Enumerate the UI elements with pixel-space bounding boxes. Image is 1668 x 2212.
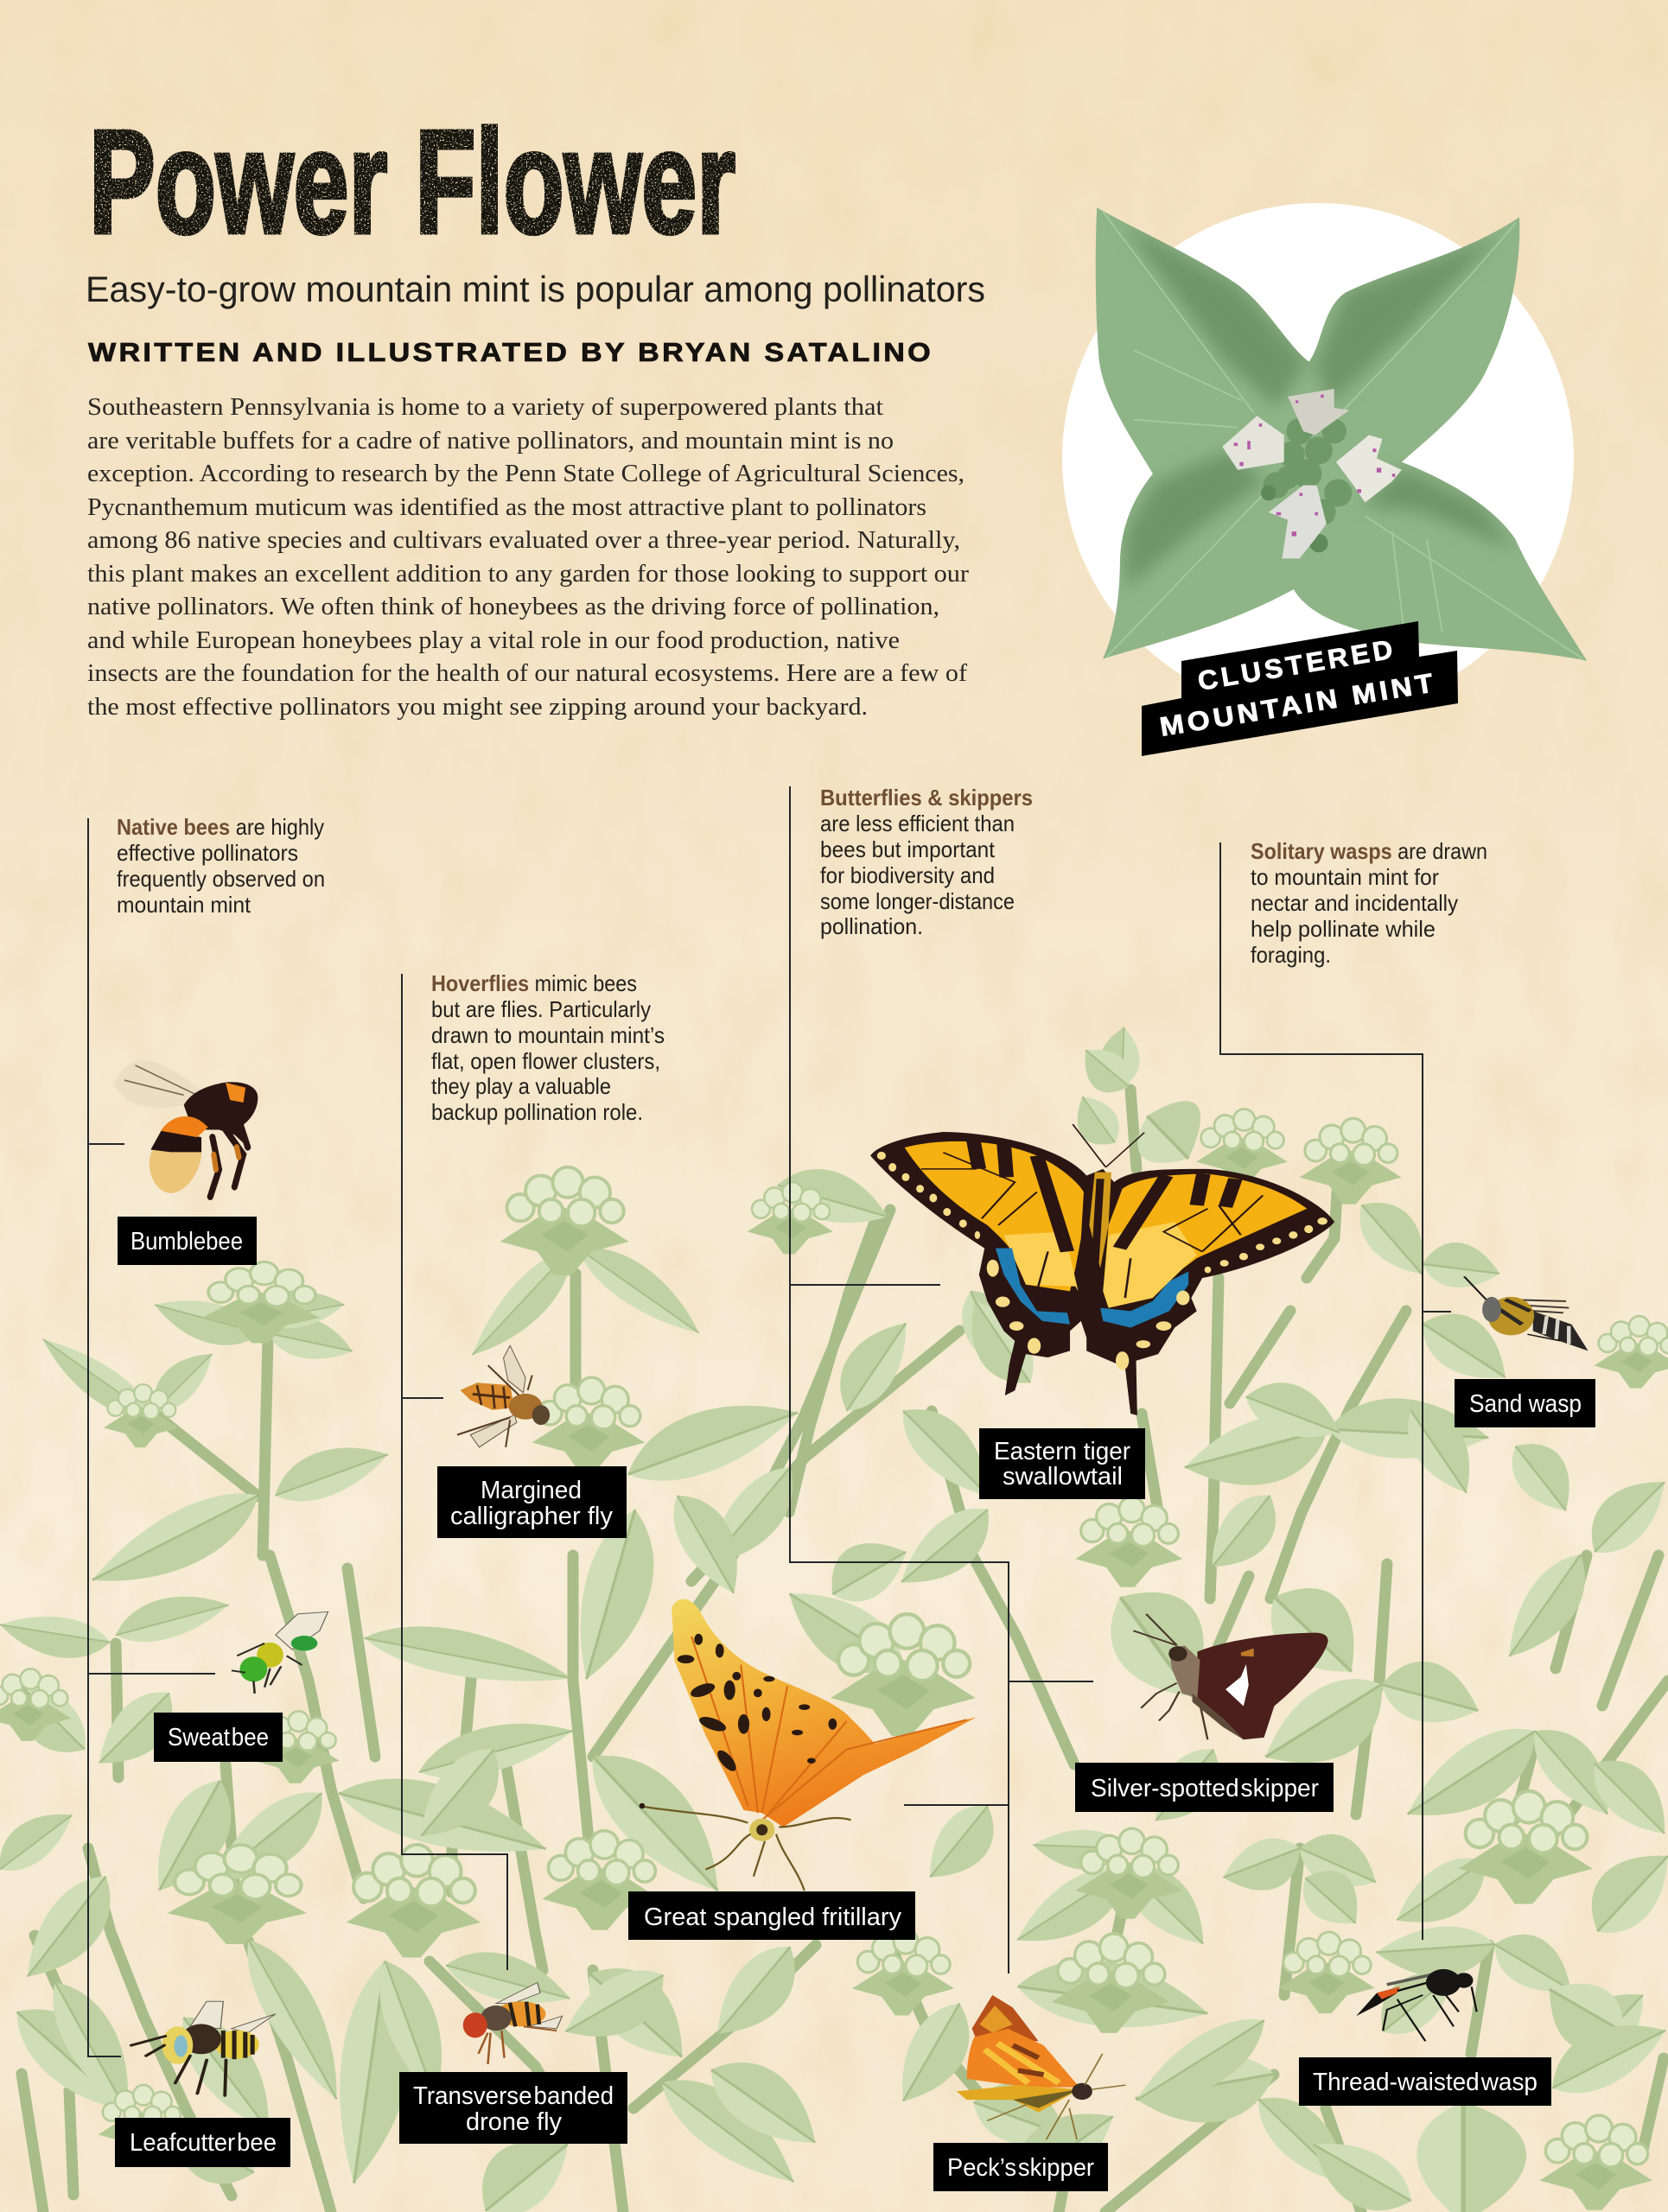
text block: solitary wasps: Solitary wasps are drawn: [1251, 838, 1487, 864]
intro body text: Southeastern Pennsylvania is home to a variety of superpowered plants that: [87, 393, 883, 421]
icon: margined calligrapher fly: [457, 1345, 550, 1447]
label: great spangled fritillary: Great spangled fritillary: [644, 1904, 901, 1931]
text block: solitary wasps: help pollinate while: [1251, 916, 1436, 942]
subtitle: Easy-to-grow mountain mint is popular among pollinators: [86, 269, 985, 309]
label: silver-spotted skipper: Silver-spotted skipper: [1091, 1775, 1319, 1802]
intro body text: the most effective pollinators you might see zipping around your backyard.: [87, 693, 868, 721]
white circle: [1062, 203, 1574, 715]
icon: leafcutter bee: [131, 2001, 276, 2095]
icon: sweat bee: [232, 1611, 328, 1694]
text block: butterflies and skippers: Butterflies & skippers: [820, 785, 1033, 810]
icon: eastern tiger swallowtail: [870, 1124, 1334, 1415]
icon: silver-spotted skipper: [1133, 1614, 1328, 1739]
text block: hoverflies: flat, open flower clusters,: [431, 1048, 660, 1074]
intro body text: among 86 native species and cultivars evaluated over a three-year period. Naturally,: [87, 526, 960, 554]
label: transverse banded drone fly: drone fly: [466, 2108, 562, 2136]
connector: native bees: [88, 818, 215, 2056]
label: bumblebee: [118, 1217, 257, 1265]
connector: hoverflies: [402, 974, 507, 1970]
title: Power Flower: [89, 100, 735, 264]
label: eastern tiger swallowtail: swallowtail: [1003, 1463, 1123, 1491]
text block: hoverflies: [431, 970, 665, 1125]
label: margined calligrapher fly: [437, 1466, 627, 1538]
icon: bumblebee: [113, 1060, 258, 1197]
label: silver-spotted skipper: [1075, 1763, 1334, 1812]
intro body text: [87, 393, 969, 721]
label: sand wasp: Sand wasp: [1469, 1390, 1582, 1418]
icon: mint leaves and flowers: [1096, 207, 1587, 661]
label: margined calligrapher fly: Margined: [481, 1477, 582, 1504]
text block: butterflies and skippers: some longer-distance: [820, 888, 1015, 914]
text block: native bees: frequently observed on: [117, 866, 325, 892]
intro body text: insects are the foundation for the health of our natural ecosystems. Here are a few of: [87, 659, 967, 687]
text block: butterflies and skippers: pollination.: [820, 913, 923, 939]
icon: great spangled fritillary: [640, 1599, 977, 1891]
icon: peck's skipper: [957, 1995, 1125, 2139]
label: eastern tiger swallowtail: [979, 1428, 1145, 1499]
text block: butterflies and skippers: [820, 785, 1033, 939]
byline: WRITTEN AND ILLUSTRATED BY BRYAN SATALINO: [88, 337, 933, 367]
intro body text: exception. According to research by the Penn State College of Agricultural Sciences,: [87, 460, 965, 487]
panel: mountain mint illustration: [1062, 203, 1587, 756]
intro body text: native pollinators. We often think of honeybees as the driving force of pollination,: [87, 593, 939, 620]
text block: butterflies and skippers: bees but important: [820, 836, 996, 862]
text block: butterflies and skippers: for biodiversity and: [820, 862, 995, 888]
intro body text: and while European honeybees play a vital role in our food production, native: [87, 626, 900, 654]
label: great spangled fritillary: [628, 1891, 915, 1940]
icon: transverse banded drone fly: [463, 1982, 563, 2064]
text block: solitary wasps: [1251, 838, 1487, 968]
label: sweat bee: [154, 1713, 283, 1762]
connector: solitary wasps: [1220, 842, 1451, 1940]
intro body text: Pycnanthemum muticum was identified as the most attractive plant to pollinators: [87, 493, 926, 521]
banner: clustered mountain mint: CLUSTERED: [1195, 633, 1398, 696]
label: sweat bee: Sweat bee: [168, 1724, 269, 1751]
label: bumblebee: Bumblebee: [131, 1228, 243, 1255]
label: transverse banded drone fly: Transverse banded: [413, 2082, 614, 2110]
intro body text: this plant makes an excellent addition to any garden for those looking to support our: [87, 560, 969, 588]
label: thread-waisted wasp: [1299, 2057, 1551, 2106]
text block: solitary wasps: to mountain mint for: [1251, 864, 1439, 890]
label: sand wasp: [1455, 1379, 1595, 1427]
banner: clustered mountain mint: MOUNTAIN MINT: [1157, 667, 1439, 742]
text block: butterflies and skippers: are less efficient than: [820, 810, 1015, 836]
connector: butterflies and skippers: [790, 786, 1093, 1974]
background illustration: mountain mint plants: [0, 1027, 1668, 2212]
text block: hoverflies: Hoverflies mimic bees: [431, 970, 637, 996]
text block: native bees: effective pollinators: [117, 840, 298, 866]
intro body text: are veritable buffets for a cadre of native pollinators, and mountain mint is no: [87, 427, 894, 454]
label: leafcutter bee: Leafcutter bee: [130, 2129, 277, 2157]
banner: clustered mountain mint: [1142, 621, 1458, 756]
label: peck's skipper: Peck’s skipper: [947, 2154, 1094, 2182]
icon: thread-waisted wasp: [1356, 1969, 1477, 2041]
label: peck's skipper: [933, 2143, 1108, 2191]
text block: native bees: mountain mint: [117, 892, 251, 918]
label: margined calligrapher fly: calligrapher fly: [450, 1503, 613, 1530]
text block: hoverflies: backup pollination role.: [431, 1099, 643, 1125]
icon: sand wasp: [1464, 1276, 1588, 1351]
text block: native bees: Native bees are highly: [117, 814, 324, 840]
text block: hoverflies: they play a valuable: [431, 1073, 611, 1099]
text block: solitary wasps: foraging.: [1251, 942, 1331, 968]
text block: solitary wasps: nectar and incidentally: [1251, 890, 1458, 916]
text block: native bees: [117, 814, 325, 918]
text block: hoverflies: but are flies. Particularly: [431, 996, 651, 1022]
label: leafcutter bee: [115, 2118, 290, 2167]
label: transverse banded drone fly: [399, 2072, 627, 2144]
label: thread-waisted wasp: Thread-waisted wasp: [1313, 2069, 1537, 2096]
text block: hoverflies: drawn to mountain mint’s: [431, 1022, 665, 1048]
label: eastern tiger swallowtail: Eastern tiger: [994, 1438, 1130, 1465]
